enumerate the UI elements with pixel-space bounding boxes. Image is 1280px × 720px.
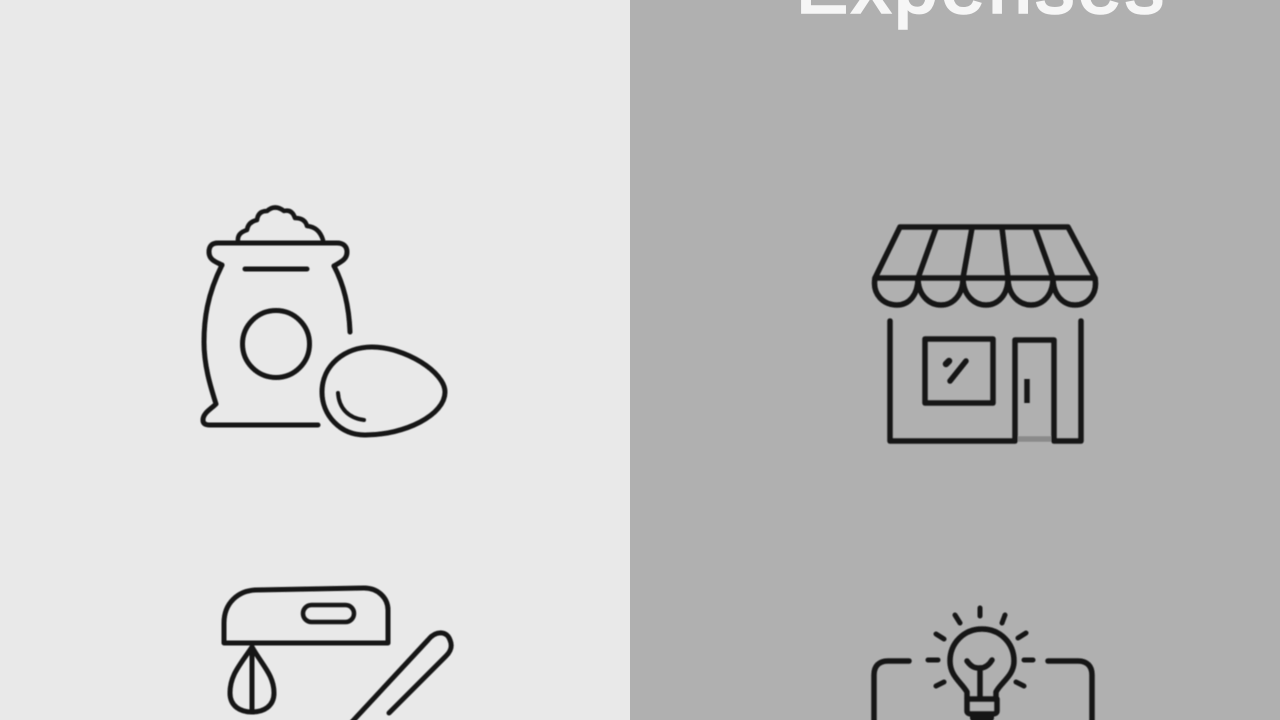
panel: right expenses column xyxy=(630,0,1280,720)
icon: flour sack and egg xyxy=(203,208,445,435)
icon: storefront xyxy=(875,227,1095,441)
panel: left ingredients column xyxy=(0,0,630,720)
icon: hand mixer and spatula xyxy=(224,588,451,720)
icon: light bulb with utility frame xyxy=(874,608,1092,720)
